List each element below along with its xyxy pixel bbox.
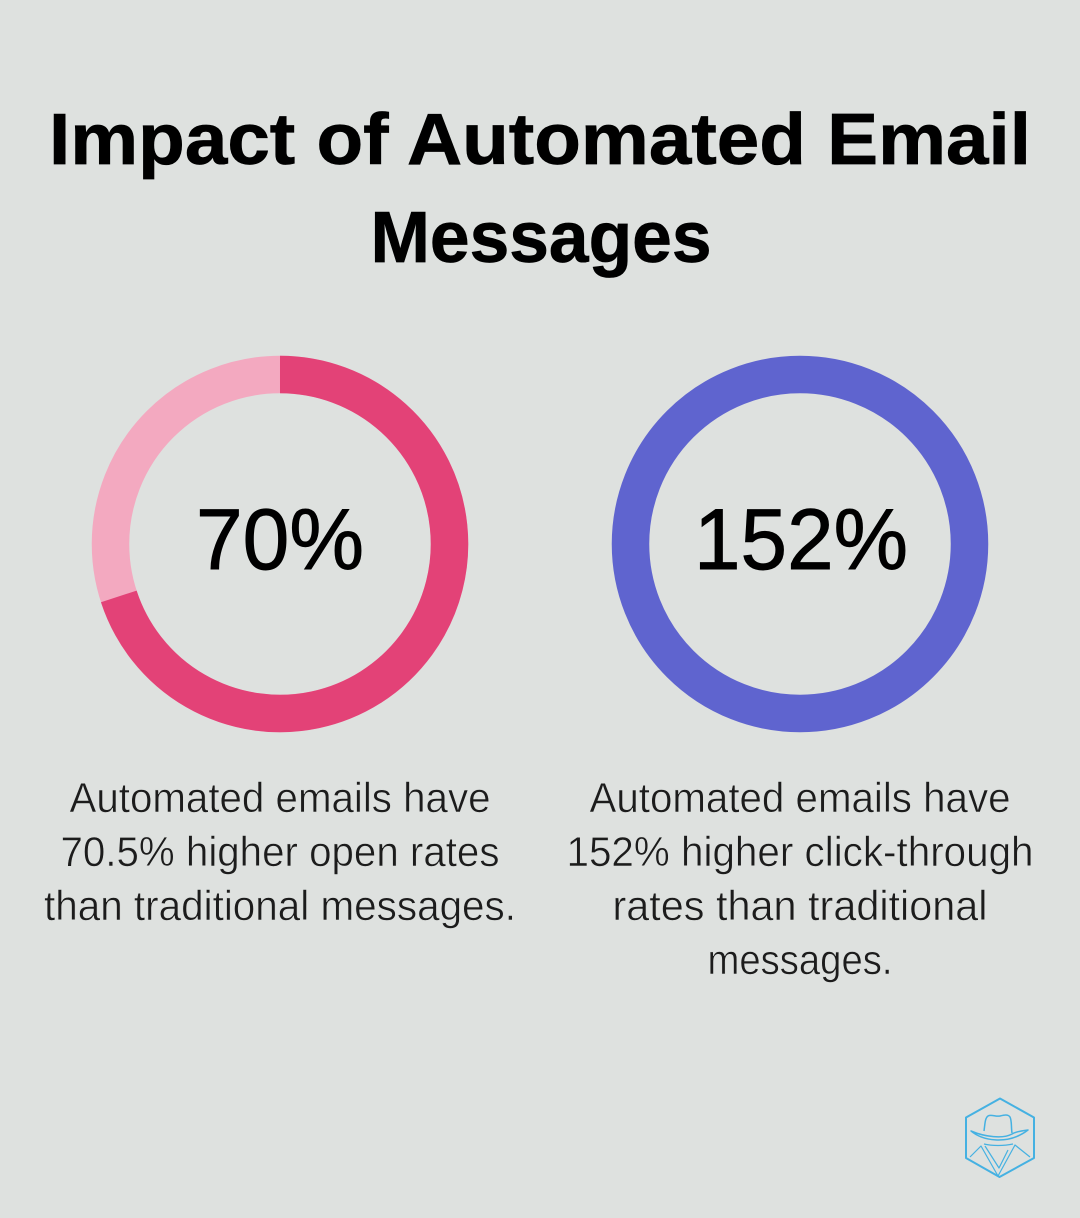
stat: 70%: 70% [196,492,364,588]
description: click-through rates [566,774,1034,983]
description: click-through rates: messages. [708,936,892,983]
donut chart: 152% [630,374,970,714]
description: click-through rates: Automated emails have [590,774,1010,821]
panel: open rates [44,374,516,929]
description: open rates [44,774,516,929]
title: Impact of Automated Email [49,99,1031,180]
description: click-through rates: 152% higher click-through [566,828,1034,875]
description: open rates: Automated emails have [70,774,490,821]
stat: 152%: 152% [694,492,908,588]
description: click-through rates: rates than traditional [612,882,988,929]
description: open rates: 70.5% higher open rates [60,828,500,875]
description: open rates: than traditional messages. [44,882,516,929]
title [49,99,1031,278]
icon: logo, hexagon with hat and coat [966,1098,1034,1177]
donut chart: 70% [110,374,450,714]
title: Messages [370,197,712,278]
panel: click-through rates [566,374,1034,983]
